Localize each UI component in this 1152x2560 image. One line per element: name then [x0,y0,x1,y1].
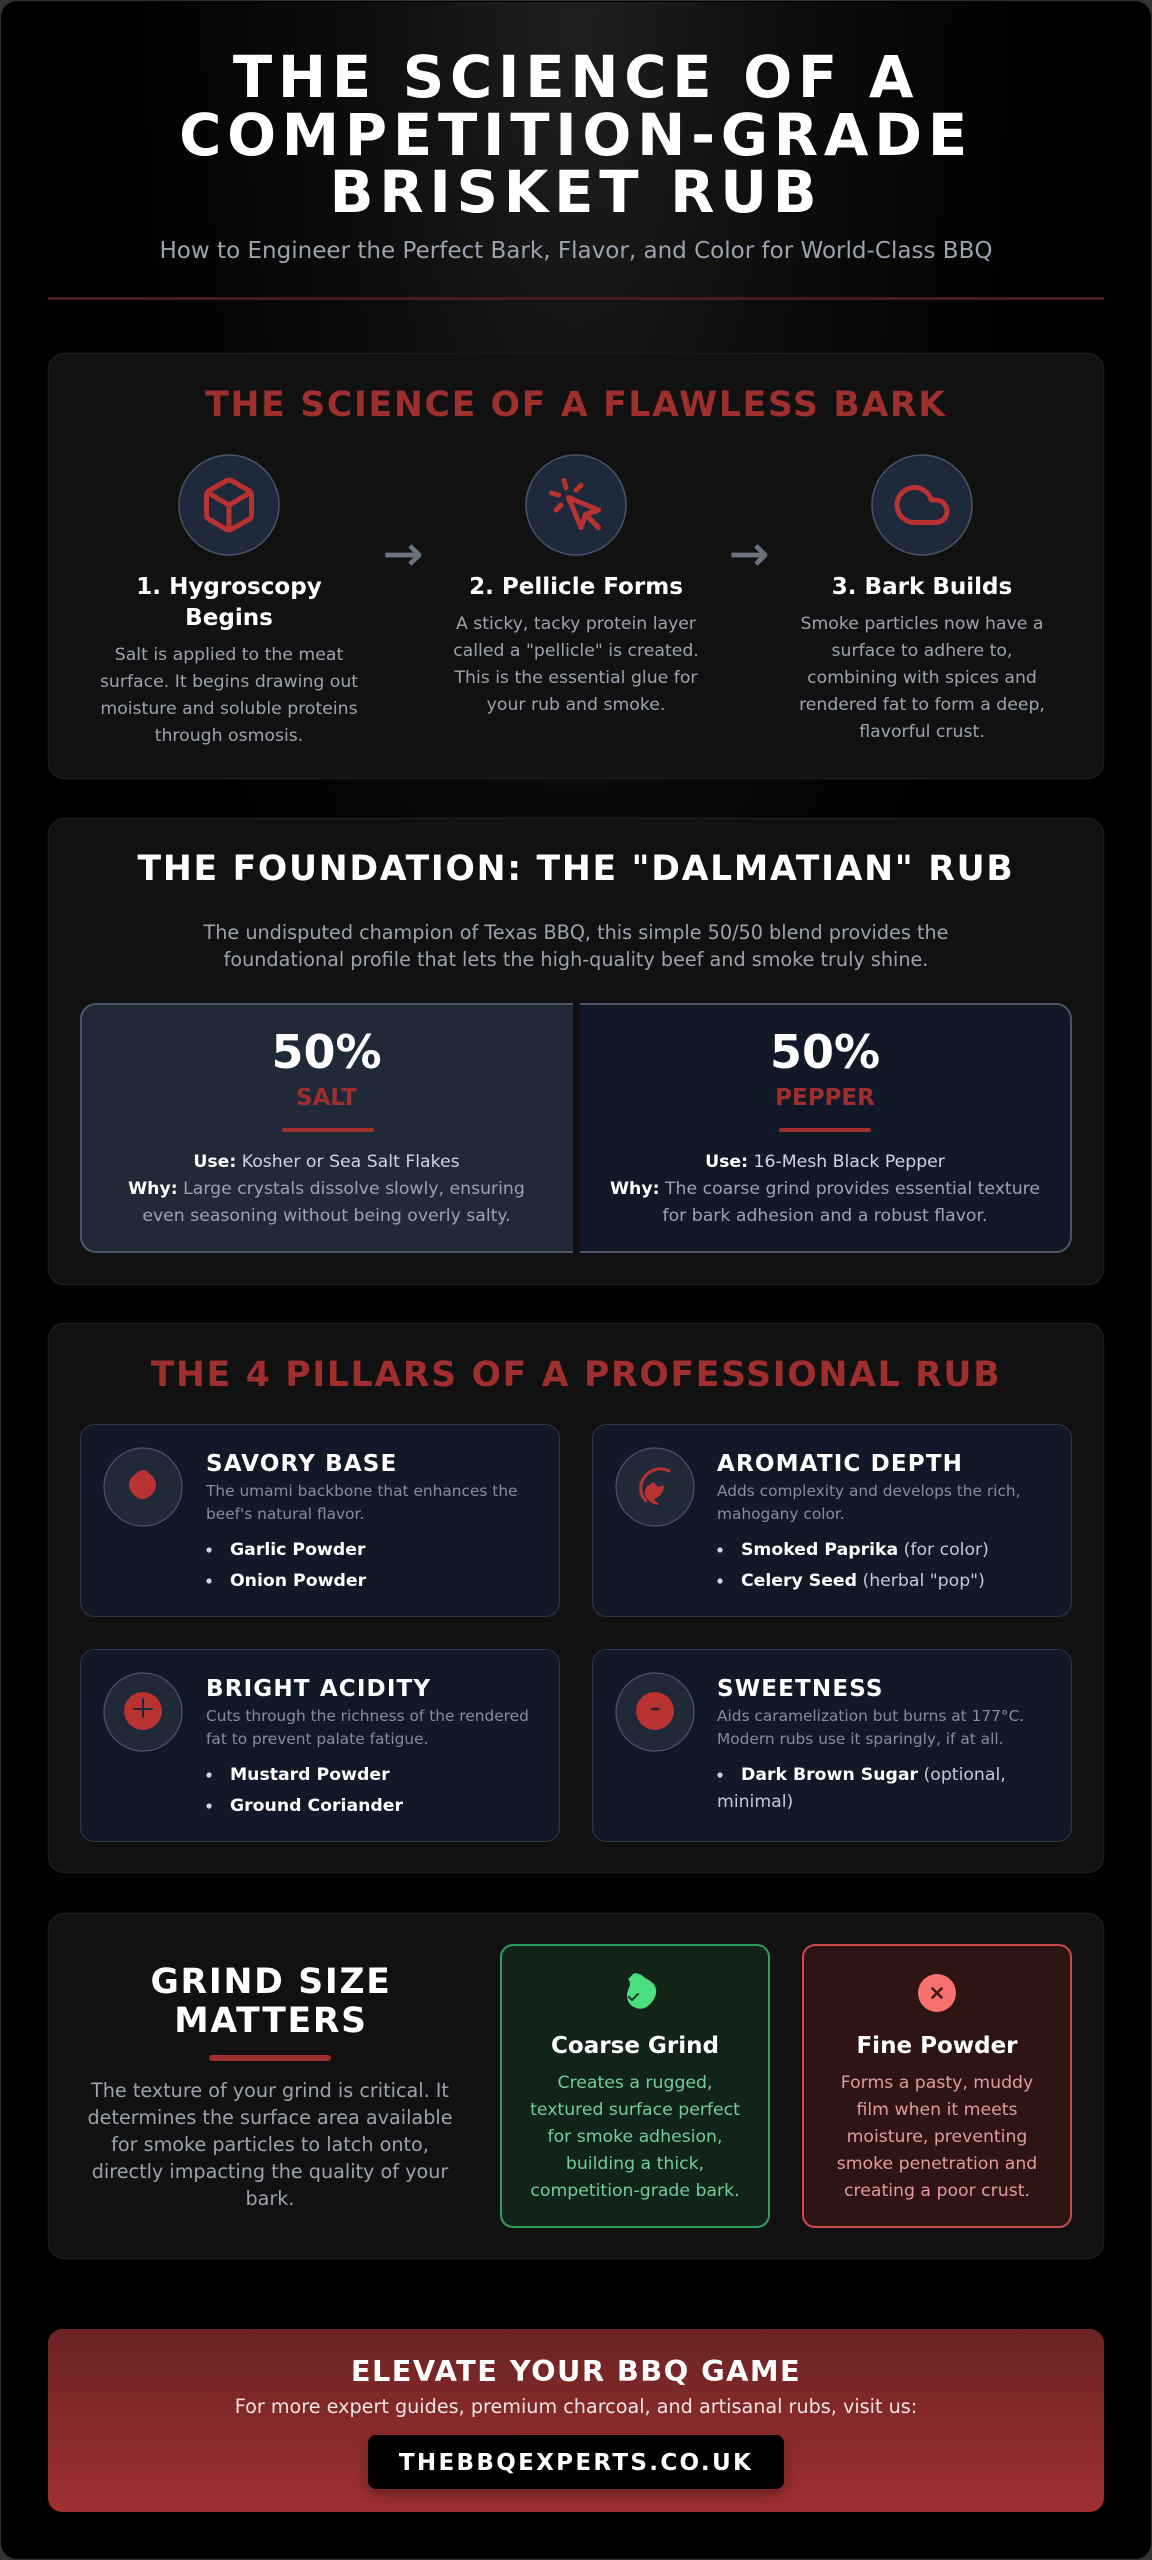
grind description: The texture of your grind is critical. It [90,2079,449,2102]
card: coarse grind [501,1945,769,2227]
arrow: → [383,526,423,582]
icon: box [179,455,279,555]
card: sweetness: SWEETNESS [717,1676,884,1702]
card: bright acidity: fat to prevent palate fatigue. [206,1730,429,1748]
card: fine powder: moisture, preventing [847,2127,1027,2147]
card: salt: Why: Large crystals dissolve slowly, ensuring [128,1179,525,1199]
intro paragraph: The undisputed champion of Texas BBQ, this simple 50/50 blend provides the [203,921,948,944]
icon: garlic [104,1448,182,1526]
step 1: hygroscopy: Salt is applied to the meat [115,645,343,665]
title: THE SCIENCE OF A [233,44,919,111]
card: aromatic depth: mahogany color. [717,1505,845,1523]
step 2: pellicle [453,455,699,715]
step 3: bark builds: combining with spices and [807,668,1037,688]
step 2: pellicle: called a "pellicle" is created. [453,641,699,661]
card: aromatic depth: AROMATIC DEPTH [717,1451,963,1477]
card: bright acidity: Cuts through the richness of the rendered [206,1707,529,1725]
grind description: bark. [245,2187,295,2210]
step 1: hygroscopy: surface. It begins drawing out [100,672,358,692]
card: fine powder: smoke penetration and [837,2154,1037,2174]
card: sweetness: Modern rubs use it sparingly, if at all. [717,1730,1004,1748]
grind description: for smoke particles to latch onto, [111,2133,429,2156]
card: savory base: Garlic Powder [230,1540,366,1560]
panel: the science of a flawless bark [48,354,1104,778]
step 3: bark builds: flavorful crust. [859,722,985,742]
card: bright acidity: Mustard Powder [230,1765,390,1785]
card: aromatic depth [592,1424,1072,1616]
card: coarse grind: for smoke adhesion, [548,2127,722,2147]
card: aromatic depth: Smoked Paprika [741,1540,898,1560]
step 3: bark builds: Smoke particles now have a [801,614,1043,634]
card: aromatic depth: Celery Seed [741,1571,857,1591]
card: pepper: Why: The coarse grind provides essential texture [610,1179,1040,1199]
card: pepper [580,1003,1072,1253]
panel: the 4 pillars [48,1324,1104,1872]
panel: the foundation [48,818,1104,1284]
card: sweetness: (optional, [924,1765,1006,1785]
icon: acidity [104,1673,182,1751]
card: savory base: Onion Powder [230,1571,367,1591]
card: coarse grind: competition-grade bark. [530,2181,740,2201]
icon: cloud [872,455,972,555]
card: savory base: SAVORY BASE [206,1451,397,1477]
card: sweetness: Dark Brown Sugar [741,1765,919,1785]
card: salt: SALT [296,1085,357,1111]
footer: call to action [48,2329,1104,2512]
heading: foundation: THE FOUNDATION: THE "DALMATIAN" RUB [138,849,1014,889]
heading: grind size: MATTERS [174,2001,368,2041]
step 2: pellicle: your rub and smoke. [487,695,665,715]
card: pepper: Use: 16-Mesh Black Pepper [705,1152,946,1172]
card: sweetness [592,1650,1072,1842]
card: pepper: PEPPER [775,1085,875,1111]
card: salt: Use: Kosher or Sea Salt Flakes [193,1152,460,1172]
card: aromatic depth: (for color) [904,1540,989,1560]
card: coarse grind: building a thick, [566,2154,704,2174]
card: savory base: beef's natural flavor. [206,1505,364,1523]
step 1: hygroscopy: moisture and soluble proteins [100,699,358,719]
card: bright acidity: BRIGHT ACIDITY [206,1676,431,1702]
grind description: directly impacting the quality of your [92,2160,448,2183]
panel: grind size matters [48,1914,1104,2258]
grind description: determines the surface area available [87,2106,453,2129]
step 1: hygroscopy: 1. Hygroscopy [136,574,322,600]
icon: cross [918,1974,956,2012]
step 1: hygroscopy: Begins [185,605,273,631]
icon: paprika [616,1448,694,1526]
card: fine powder [803,1945,1071,2227]
card: aromatic depth: (herbal "pop") [862,1571,985,1591]
card: aromatic depth: Adds complexity and develops the rich, [717,1482,1021,1500]
card: fine powder: creating a poor crust. [844,2181,1030,2201]
card: sweetness: minimal) [717,1792,793,1812]
intro paragraph: foundational profile that lets the high-quality beef and smoke truly shine. [224,948,928,971]
step 1: hygroscopy: through osmosis. [155,726,303,746]
step 2: pellicle: 2. Pellicle Forms [469,574,683,600]
footer heading: ELEVATE YOUR BBQ GAME [351,2354,801,2388]
step 2: pellicle: A sticky, tacky protein layer [456,614,697,634]
title: BRISKET RUB [330,159,822,226]
button: website: THEBBQEXPERTS.CO.UK [399,2450,753,2476]
card: pepper: 50% [770,1025,880,1079]
step 3: bark builds: 3. Bark Builds [832,574,1012,600]
icon: pointer click [526,455,626,555]
step 3: bark builds [799,455,1045,742]
card: salt [80,1003,573,1253]
heading: grind size: GRIND SIZE [150,1962,392,2002]
card: salt: 50% [271,1025,382,1079]
subtitle: How to Engineer the Perfect Bark, Flavor, and Color for World-Class BBQ [159,238,993,264]
button: website [368,2435,784,2489]
card: coarse grind: Creates a rugged, [558,2073,712,2093]
card: savory base: The umami backbone that enhances the [205,1482,518,1500]
title: COMPETITION-GRADE [179,102,973,169]
icon: check blob [627,1973,656,2009]
card: salt: even seasoning without being overly salty. [142,1206,511,1226]
card: bright acidity: Ground Coriander [230,1796,403,1816]
step 3: bark builds: surface to adhere to, [832,641,1012,661]
card: sweetness: Aids caramelization but burns at 177°C. [717,1707,1024,1725]
card: coarse grind: Coarse Grind [551,2033,719,2059]
card: pepper: for bark adhesion and a robust flavor. [663,1206,987,1226]
step 1: hygroscopy [100,455,358,746]
heading: flawless bark: THE SCIENCE OF A FLAWLESS BARK [205,385,947,425]
icon: sweetness [616,1673,694,1751]
step 3: bark builds: rendered fat to form a deep, [799,695,1045,715]
card: savory base [80,1424,560,1616]
heading: pillars: THE 4 PILLARS OF A PROFESSIONAL RUB [151,1355,1001,1395]
card: fine powder: Forms a pasty, muddy [841,2073,1033,2093]
step 2: pellicle: This is the essential glue for [453,668,698,688]
card: fine powder: Fine Powder [856,2033,1018,2059]
card: fine powder: film when it meets [857,2100,1017,2120]
header [159,44,993,264]
arrow: → [729,526,769,582]
card: coarse grind: textured surface perfect [530,2100,740,2120]
footer text: For more expert guides, premium charcoal, and artisanal rubs, visit us: [235,2395,917,2418]
card: bright acidity [80,1650,560,1842]
